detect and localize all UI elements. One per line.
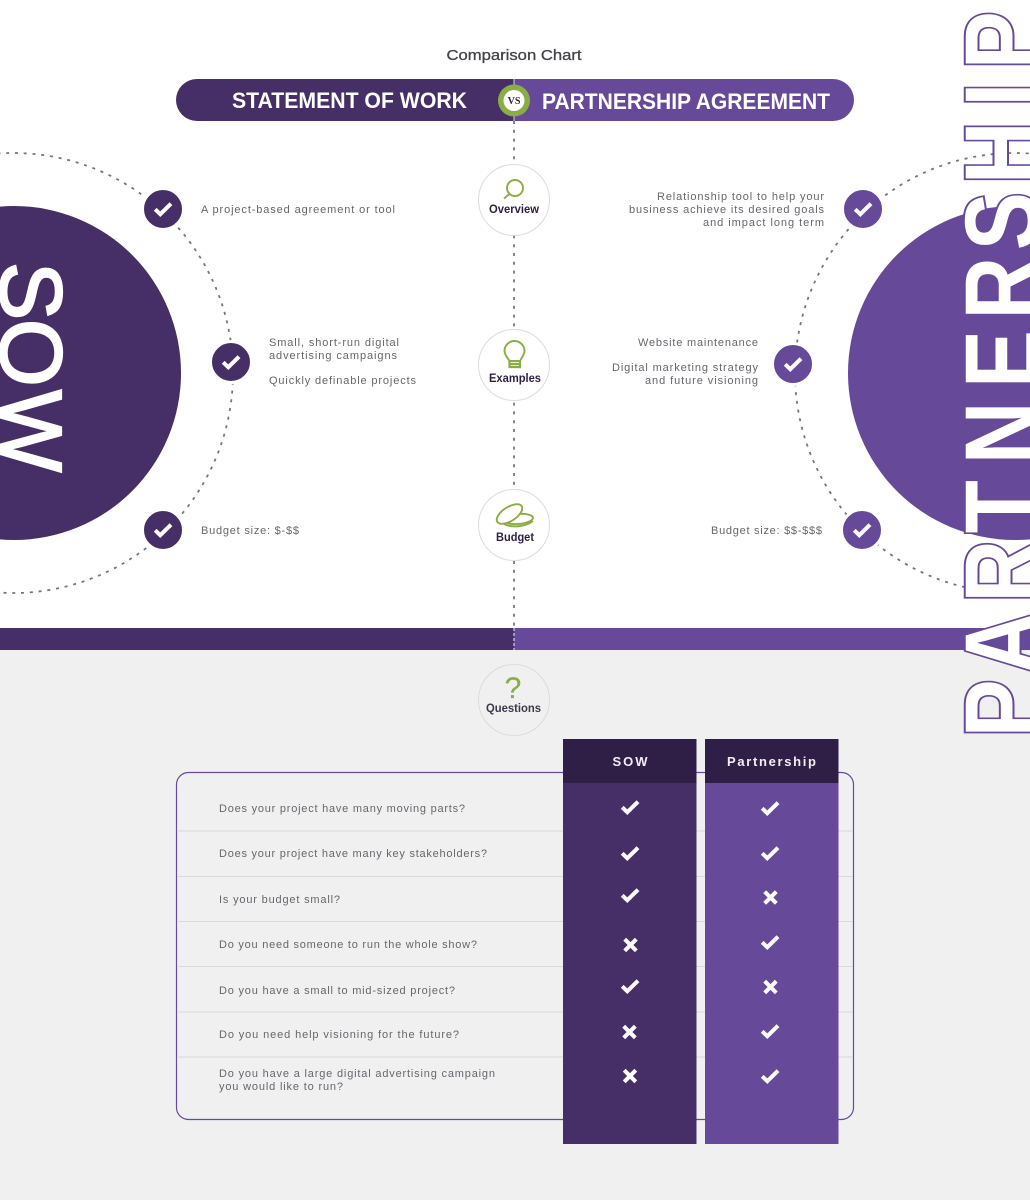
- node: Examples: [478, 330, 550, 400]
- text: Partnership examples: Website maintenance: [638, 337, 758, 349]
- text: Partnership budget: Budget size: $$-$$$: [711, 525, 822, 537]
- text: SOW budget: Budget size: $-$$: [201, 525, 299, 537]
- text: SOW overview: A project-based agreement or tool: [201, 204, 395, 216]
- SOW marks: [622, 802, 638, 1082]
- title: Comparison Chart: [446, 47, 582, 64]
- check badge: SOW budget: [142, 510, 184, 550]
- header banner: [176, 79, 854, 121]
- heading: partnership agreement: PARTNERSHIP AGREEMENT: [542, 89, 831, 114]
- check badge: SOW examples: [210, 342, 252, 382]
- questions list: you would like to run?: [219, 1081, 343, 1093]
- column: Partnership: [705, 739, 838, 1144]
- node: Budget: [478, 490, 550, 560]
- dotted orbit: Partnership: [795, 153, 1030, 593]
- node: Overview: [478, 164, 550, 236]
- text: SOW examples: Quickly definable projects: [269, 375, 416, 387]
- text: Partnership overview: Relationship tool to help your: [657, 191, 824, 203]
- Partnership marks: [762, 803, 778, 1081]
- lower section background: [0, 650, 1030, 1200]
- text: Partnership overview: [629, 191, 824, 229]
- icon: magnifier: [504, 180, 523, 198]
- node: Examples: Examples: [489, 373, 541, 385]
- questions list: Do you have a large digital advertising campaign: [219, 1068, 495, 1080]
- questions list: Do you have a small to mid-sized project?: [219, 985, 455, 997]
- divider band: [0, 628, 1030, 650]
- text: SOW examples: Small, short-run digital: [269, 337, 399, 349]
- questions list: Do you need someone to run the whole show?: [219, 939, 477, 951]
- column: SOW: SOW: [612, 754, 648, 769]
- questions list: Does your project have many key stakeholders?: [219, 848, 487, 860]
- icon: question mark: ?: [505, 672, 521, 705]
- node: Questions: Questions: [486, 703, 541, 715]
- vs badge: VS: [508, 96, 521, 107]
- column: SOW: [563, 739, 696, 1144]
- text: SOW examples: advertising campaigns: [269, 350, 398, 362]
- big circle: Partnership: [848, 206, 1030, 540]
- questions list: Do you need help visioning for the future?: [219, 1029, 459, 1041]
- text: SOW examples: [269, 337, 416, 387]
- node: Overview: Overview: [489, 204, 539, 216]
- table frame: [176, 772, 854, 1120]
- center dotted line: [513, 121, 515, 650]
- questions list: Does your project have many moving parts?: [219, 803, 465, 815]
- dotted orbit: SOW: [0, 153, 233, 593]
- check badge: SOW overview: [142, 188, 184, 230]
- check badge: Partnership overview: [842, 188, 884, 230]
- icon: light bulb: [504, 341, 524, 367]
- check badge: Partnership budget: [842, 510, 882, 550]
- text: Partnership overview: and impact long term: [703, 217, 824, 229]
- check badge: Partnership examples: [772, 344, 814, 384]
- icon: coins: [494, 500, 533, 528]
- comparison table: [176, 739, 854, 1144]
- heading: statement of work: STATEMENT OF WORK: [232, 88, 467, 113]
- text: Partnership examples: and future visioning: [645, 375, 758, 387]
- text: Partnership overview: business achieve its desired goals: [629, 204, 824, 216]
- big circle: SOW: [0, 206, 181, 540]
- node: Budget: Budget: [496, 532, 534, 544]
- row dividers: [177, 831, 853, 1057]
- node: Questions: [478, 664, 550, 736]
- questions list: Is your budget small?: [219, 894, 340, 906]
- vs badge: [498, 84, 530, 116]
- questions list: [219, 803, 495, 1093]
- text: Partnership examples: [612, 337, 758, 387]
- column: Partnership: Partnership: [727, 754, 816, 769]
- text: Partnership examples: Digital marketing strategy: [612, 362, 758, 374]
